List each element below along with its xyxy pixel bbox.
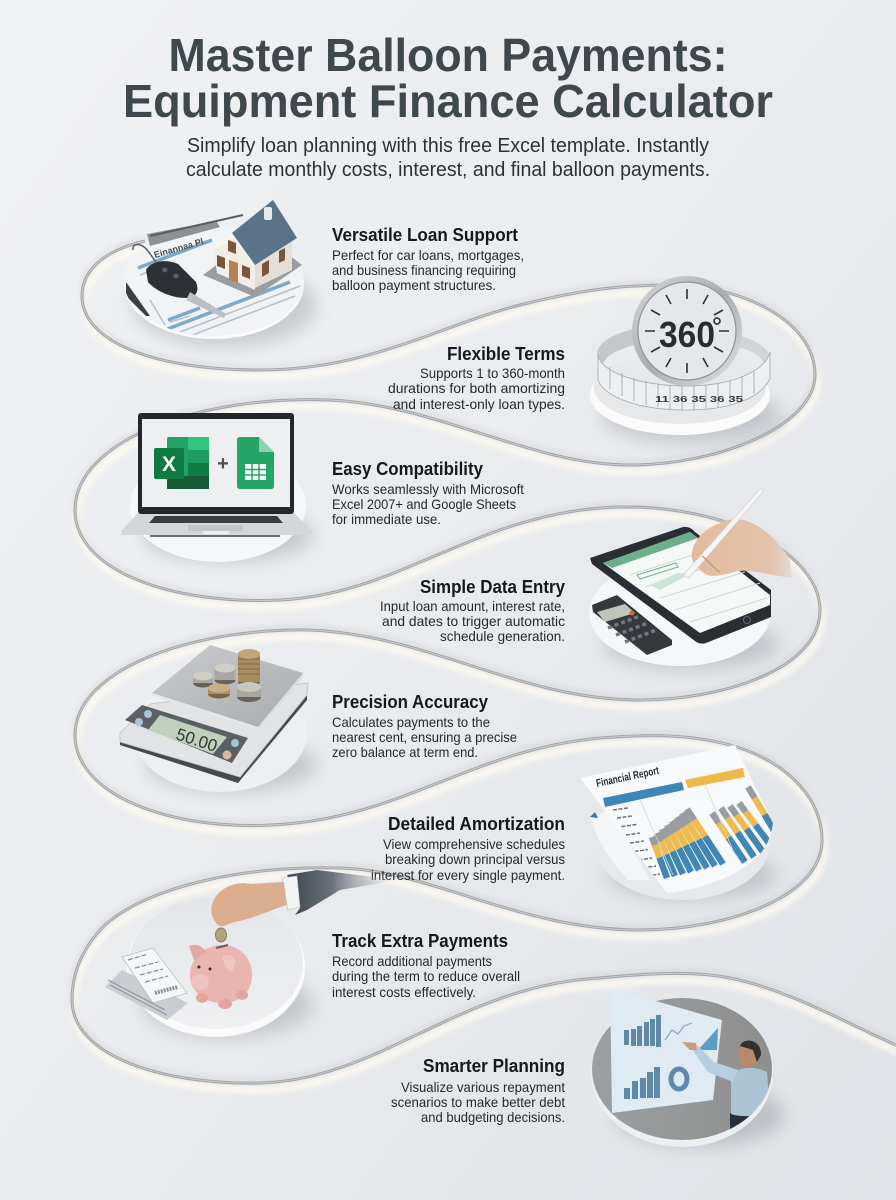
text: Easy Compatibility: Works seamlessly with Microsoft (332, 481, 524, 497)
text: Smarter Planning: Visualize various repayment (401, 1079, 565, 1095)
text: Simple Data Entry: and dates to trigger automatic (382, 613, 565, 629)
heading: Detailed Amortization: Detailed Amortization (388, 813, 565, 834)
winding ribbon path (72, 238, 896, 1090)
presenter (682, 1040, 768, 1129)
icon: laptop with Excel and Sheets logos (121, 413, 313, 562)
icon: digital scale with coins: 50.00 (174, 725, 220, 756)
title (123, 29, 773, 127)
text: Easy Compatibility: Excel 2007+ and Google Sheets (332, 496, 516, 512)
disk (127, 897, 305, 1037)
text: Versatile Loan Support: and business financing requiring (332, 262, 516, 278)
disk (124, 229, 304, 339)
icon: digital scale with coins (120, 645, 317, 792)
room (592, 998, 772, 1140)
coin (216, 928, 226, 942)
icon: 360 clock and measuring tape on disk (590, 276, 782, 443)
back sheet (590, 810, 650, 880)
screen charts (624, 1015, 661, 1099)
text: Easy Compatibility: for immediate use. (332, 511, 441, 527)
clipboard clip (147, 221, 220, 246)
house (203, 240, 302, 297)
text: Detailed Amortization: interest for every single payment. (371, 867, 565, 883)
subtitle (186, 135, 710, 181)
text: Track Extra Payments: Record additional payments (332, 953, 492, 969)
text: Versatile Loan Support: Perfect for car loans, mortgages, (332, 247, 524, 263)
tablet (590, 527, 771, 644)
icon: tablet spreadsheet, calculator and hand with stylus (589, 489, 792, 669)
text: Simple Data Entry (380, 598, 565, 644)
projected screen (610, 988, 722, 1113)
text: Flexible Terms: Supports 1 to 360-month (420, 365, 565, 381)
subtitle: Simplify loan planning with this free Excel template. Instantly (187, 135, 709, 157)
heading: Flexible Terms: Flexible Terms (447, 343, 565, 364)
text: Precision Accuracy: Calculates payments to the (332, 714, 490, 730)
text: Flexible Terms: and interest-only loan types. (393, 396, 565, 412)
stacked bars (652, 787, 781, 878)
piggy bank (189, 945, 252, 1009)
icon: laptop with Excel and Sheets logos: + (217, 453, 229, 475)
tape back (597, 329, 634, 365)
text: Smarter Planning (391, 1079, 565, 1125)
disk (130, 450, 306, 562)
Excel logo: X (162, 453, 176, 476)
icon: 360 clock and measuring tape on disk: 11 36 35 36 35 (655, 395, 744, 404)
text: Precision Accuracy: zero balance at term end. (332, 744, 478, 760)
icon: financial report with stacked bar charts (580, 745, 781, 900)
text: Flexible Terms: durations for both amortizing (388, 380, 565, 396)
title: Master Balloon Payments: (168, 29, 728, 81)
heading: Simple Data Entry: Simple Data Entry (420, 576, 566, 597)
icon: 360 clock and measuring tape on disk: 360 (659, 314, 715, 355)
icon: house, keys and loan document on disk: Einannaa Pl (153, 236, 205, 260)
icon: piggy bank, receipts and hand dropping coin (105, 870, 400, 1037)
disk rim (591, 999, 773, 1147)
heading: Smarter Planning: Smarter Planning (423, 1055, 565, 1076)
Excel logo (154, 437, 209, 489)
hand (692, 519, 792, 578)
disk (594, 786, 770, 900)
text: Smarter Planning: and budgeting decisions. (421, 1109, 565, 1125)
disk (589, 560, 771, 666)
heading: Track Extra Payments: Track Extra Payments (332, 930, 508, 951)
icon: house, keys and loan document on disk (120, 200, 317, 347)
text: Versatile Loan Support: balloon payment structures. (332, 277, 496, 293)
weighing plate (152, 645, 303, 727)
Sheets logo (237, 437, 274, 489)
disk (590, 355, 770, 435)
arm sleeve (287, 870, 400, 915)
text: Simple Data Entry: schedule generation. (440, 628, 565, 644)
text: Simple Data Entry: Input loan amount, interest rate, (380, 598, 565, 614)
laptop base (121, 513, 312, 535)
title: Equipment Finance Calculator (123, 75, 773, 127)
report sheet (580, 745, 773, 893)
scale panel (125, 705, 248, 763)
icon: presenter with projected dashboard (591, 988, 785, 1147)
text: Smarter Planning: scenarios to make better debt (391, 1094, 565, 1110)
disk (133, 674, 307, 792)
text: Track Extra Payments: during the term to reduce overall (332, 968, 520, 984)
text: Detailed Amortization: View comprehensive schedules (383, 836, 565, 852)
calculator (592, 595, 672, 655)
text: Easy Compatibility (332, 481, 524, 527)
text: Precision Accuracy (332, 714, 517, 760)
stylus (683, 489, 763, 578)
icon: financial report with stacked bar charts: Financial Report (595, 765, 660, 790)
text: Precision Accuracy: nearest cent, ensuring a precise (332, 729, 517, 745)
hand (211, 882, 287, 926)
laptop screen (138, 413, 294, 514)
text: Versatile Loan Support (332, 247, 524, 293)
measuring tape (598, 352, 770, 410)
car key (133, 244, 156, 262)
clock (632, 276, 742, 386)
text: Track Extra Payments: interest costs effectively. (332, 984, 476, 1000)
heading: Easy Compatibility: Easy Compatibility (332, 458, 484, 479)
text: Track Extra Payments (332, 953, 520, 1000)
text: Flexible Terms (388, 365, 565, 412)
text: Detailed Amortization (371, 836, 565, 883)
text: Detailed Amortization: breaking down principal versus (385, 851, 565, 867)
heading: Versatile Loan Support: Versatile Loan Support (332, 224, 518, 245)
coins (193, 649, 261, 702)
scale body (120, 690, 307, 783)
receipts (105, 948, 188, 1020)
heading: Precision Accuracy: Precision Accuracy (332, 691, 489, 712)
subtitle: calculate monthly costs, interest, and final balloon payments. (186, 159, 710, 181)
